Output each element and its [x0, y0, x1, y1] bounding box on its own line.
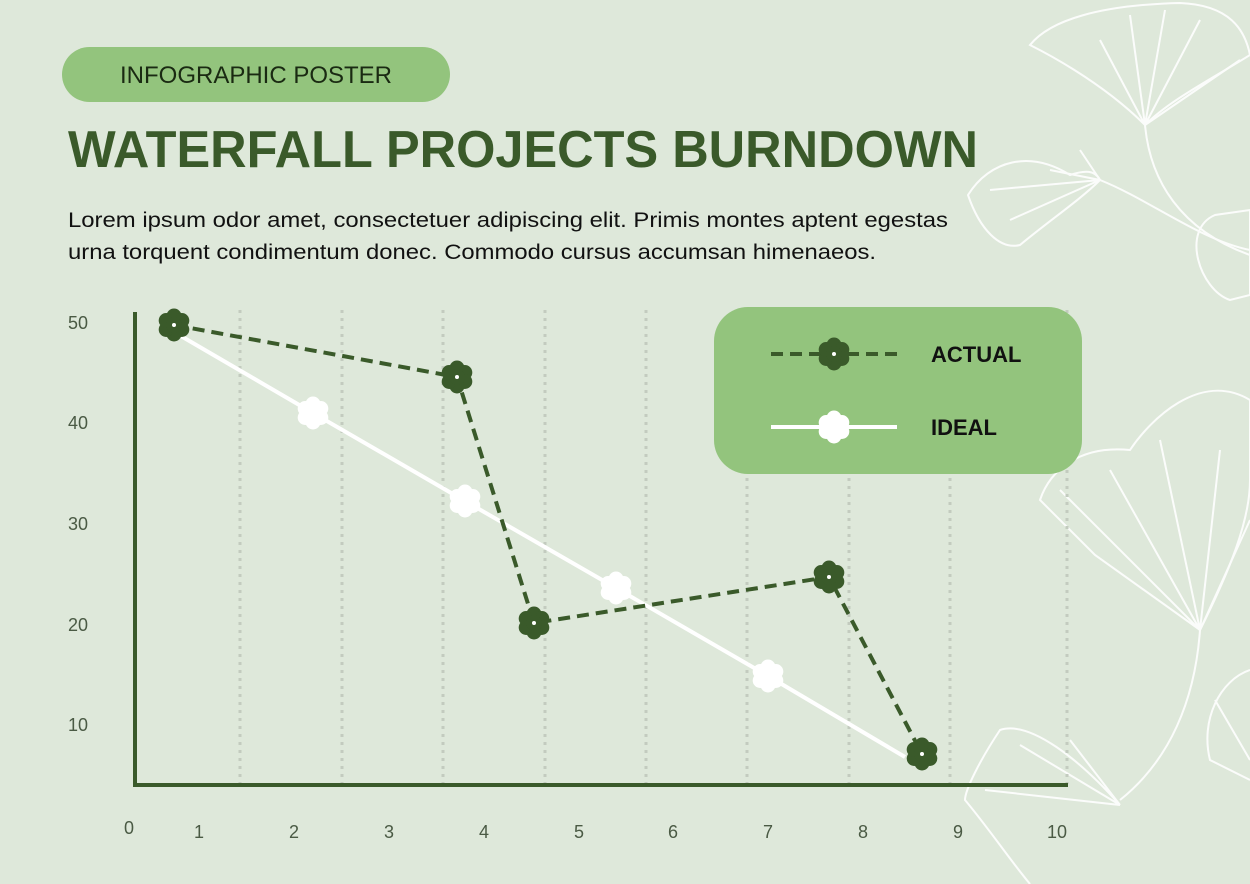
- ideal line: [174, 332, 905, 757]
- y labels: 20: [68, 615, 88, 635]
- header pill: INFOGRAPHIC POSTER: [120, 62, 392, 89]
- x labels: 0: [124, 818, 134, 838]
- body text: [68, 209, 948, 264]
- x labels: 1: [194, 822, 204, 842]
- x labels: 2: [289, 822, 299, 842]
- x labels: 10: [1047, 822, 1067, 842]
- y labels: 50: [68, 313, 88, 333]
- legend: actual: [771, 338, 1021, 370]
- y labels: 40: [68, 413, 88, 433]
- y labels: 10: [68, 715, 88, 735]
- x labels: 5: [574, 822, 584, 842]
- y labels: [68, 313, 88, 735]
- x labels: 9: [953, 822, 963, 842]
- x labels: 6: [668, 822, 678, 842]
- chart: [68, 308, 1068, 842]
- x labels: 8: [858, 822, 868, 842]
- x labels: [124, 818, 1067, 842]
- x labels: 3: [384, 822, 394, 842]
- x labels: 4: [479, 822, 489, 842]
- axes: [135, 312, 1068, 785]
- header pill: [62, 47, 450, 102]
- legend: ideal: [771, 410, 997, 444]
- title: WATERFALL PROJECTS BURNDOWN: [68, 121, 978, 179]
- legend: [714, 307, 1082, 474]
- legend: ideal: IDEAL: [931, 415, 997, 440]
- decorative ginkgo leaves: [965, 3, 1250, 884]
- body text: Lorem ipsum odor amet, consectetuer adipiscing elit. Primis montes aptent egestas: [68, 209, 948, 232]
- body text: urna torquent condimentum donec. Commodo cursus accumsan himenaeos.: [68, 241, 876, 264]
- y labels: 30: [68, 514, 88, 534]
- legend: actual: ACTUAL: [931, 342, 1021, 367]
- actual line: [159, 308, 937, 770]
- x labels: 7: [763, 822, 773, 842]
